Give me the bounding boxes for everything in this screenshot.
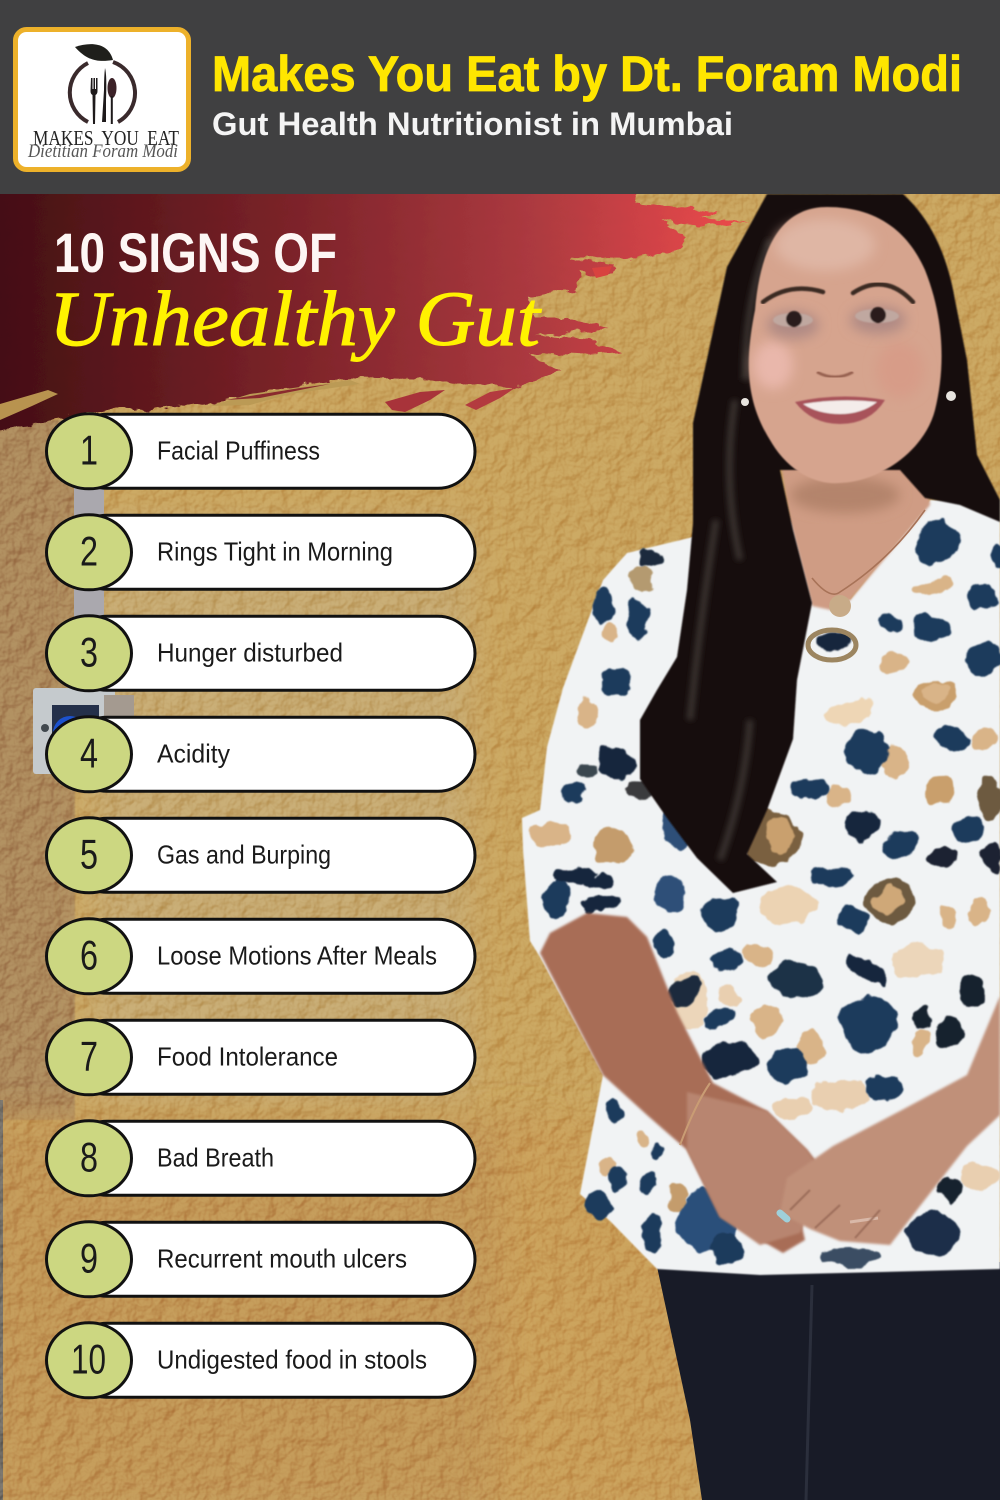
sign 5: 5 bbox=[80, 830, 98, 877]
face: eyebrows bbox=[763, 284, 913, 302]
sign 4: 4 bbox=[80, 729, 98, 776]
blouse pattern: navy blotches bbox=[543, 512, 1000, 1266]
person: neck and chest bbox=[780, 450, 930, 612]
sign 1 bbox=[46, 414, 475, 489]
sign 2: 2 bbox=[80, 527, 98, 574]
sign 7: Food Intolerance bbox=[157, 1041, 338, 1071]
header bar bbox=[0, 0, 1000, 194]
sign 9: 9 bbox=[80, 1234, 98, 1281]
logo: cutlery bbox=[90, 68, 116, 124]
face: smile bbox=[795, 396, 885, 424]
sign 2: Rings Tight in Morning bbox=[157, 536, 393, 566]
sign 7 bbox=[46, 1020, 475, 1095]
person: trousers bbox=[656, 1262, 1000, 1500]
person: long dark hair bbox=[640, 194, 1000, 893]
logo card bbox=[16, 30, 188, 170]
face: eyes bbox=[773, 307, 899, 327]
person photo bbox=[522, 194, 1000, 1500]
sign 2 bbox=[46, 515, 475, 590]
red brush banner bbox=[0, 186, 1000, 432]
sign 5: Gas and Burping bbox=[157, 839, 331, 869]
person: face bbox=[741, 207, 956, 483]
bracelet bbox=[680, 1083, 710, 1145]
heading: 10 signs of: 10 SIGNS OF bbox=[54, 221, 337, 284]
person: necklace bbox=[812, 510, 925, 617]
sign 3 bbox=[46, 616, 475, 691]
sign 6 bbox=[46, 919, 475, 994]
sign 3: Hunger disturbed bbox=[157, 637, 343, 667]
sign 1: 1 bbox=[80, 426, 98, 473]
logo: tagline: Dietitian Foram Modi bbox=[27, 141, 178, 162]
logo: plate ring bbox=[70, 62, 135, 122]
list of 10 signs bbox=[46, 414, 475, 1398]
person: printed blouse bbox=[522, 500, 1000, 1275]
sign 10 bbox=[46, 1323, 475, 1398]
sign 6: Loose Motions After Meals bbox=[157, 940, 437, 970]
wall access device bbox=[33, 688, 134, 774]
sign 4: Acidity bbox=[157, 738, 230, 768]
person: left arm and hand bbox=[540, 913, 830, 1253]
person: right arm and hand bbox=[780, 996, 1000, 1245]
heading: Unhealthy Gut: Unhealthy Gut bbox=[49, 275, 542, 362]
earrings bbox=[741, 391, 956, 406]
sign 9: Recurrent mouth ulcers bbox=[157, 1243, 407, 1273]
header title: Makes You Eat by Dt. Foram Modi bbox=[212, 46, 962, 102]
door frame strip bbox=[74, 488, 104, 713]
header subtitle: Gut Health Nutritionist in Mumbai bbox=[212, 106, 733, 142]
sign 5 bbox=[46, 818, 475, 893]
sign 3: 3 bbox=[80, 628, 98, 675]
face: nose bbox=[817, 372, 853, 377]
sign 10: Undigested food in stools bbox=[157, 1344, 427, 1374]
sign 7: 7 bbox=[80, 1032, 98, 1079]
sign 8 bbox=[46, 1121, 475, 1196]
blouse pattern: tan blotches bbox=[528, 564, 1000, 1214]
sign 9 bbox=[46, 1222, 475, 1297]
logo: name: MAKES YOU EAT bbox=[33, 126, 179, 150]
sign 4 bbox=[46, 717, 475, 792]
sign 6: 6 bbox=[80, 931, 98, 978]
sign 10: 10 bbox=[71, 1335, 106, 1382]
face: eye shadows bbox=[767, 306, 906, 339]
sign 1: Facial Puffiness bbox=[157, 435, 320, 465]
sign 8: 8 bbox=[80, 1133, 98, 1180]
logo: leaf bbox=[75, 44, 113, 61]
sign 8: Bad Breath bbox=[157, 1142, 274, 1172]
